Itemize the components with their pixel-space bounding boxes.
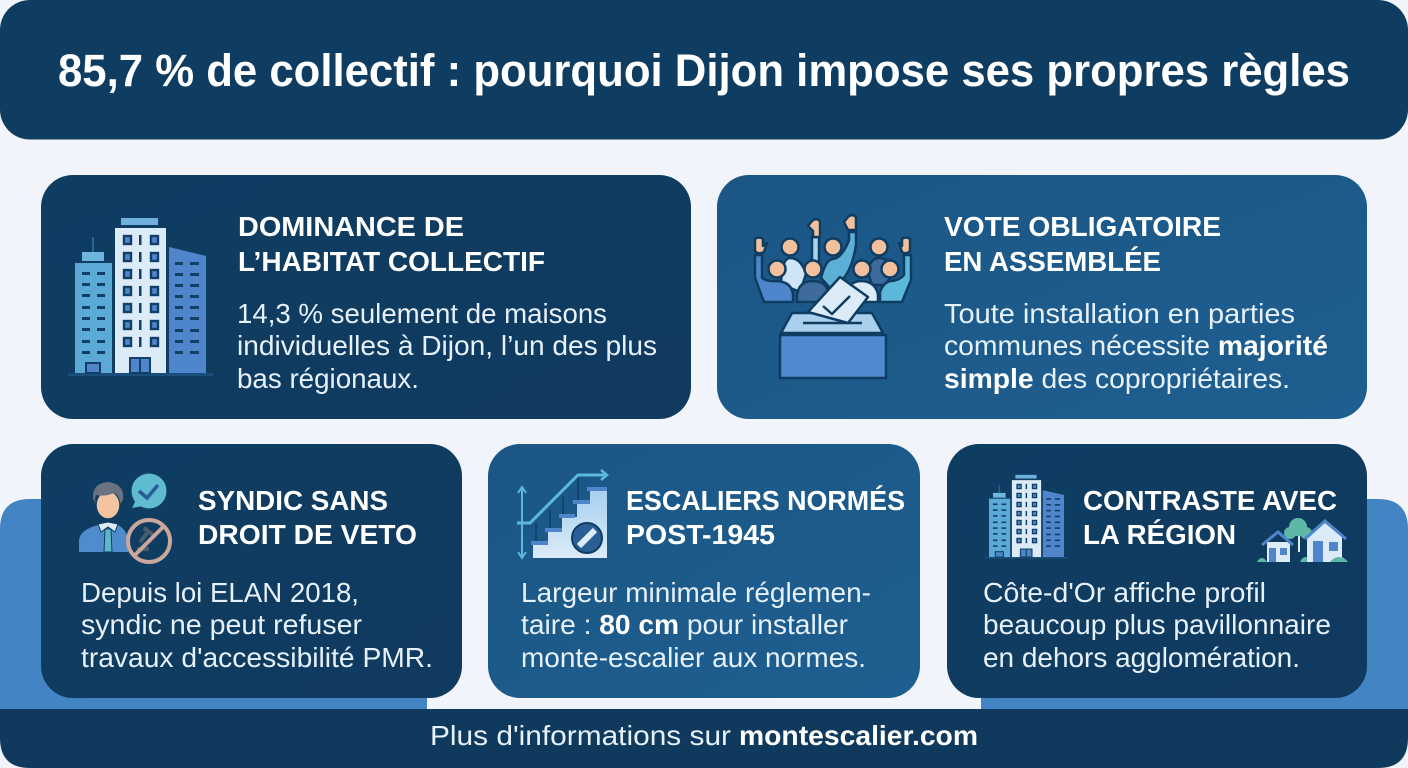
text: dominance body: 14,3 % seulement de maisons: [237, 298, 607, 329]
heading: syndic: [198, 485, 417, 550]
heading: dominance: L’HABITAT COLLECTIF: [238, 246, 545, 277]
heading: vote: EN ASSEMBLÉE: [944, 246, 1161, 277]
text: vote body: Toute installation en parties: [944, 298, 1295, 329]
text: syndic body: [81, 577, 433, 673]
text: vote body: communes nécessite majorité: [944, 330, 1328, 361]
text: escaliers body: Largeur minimale réglemen-: [521, 577, 871, 608]
heading: dominance: DOMINANCE DE: [238, 211, 464, 242]
icon: apartment buildings: [68, 218, 213, 376]
panel: dominance de l'habitat collectif: [41, 175, 691, 419]
text: contraste body: beaucoup plus pavillonnaire: [983, 609, 1331, 640]
heading: syndic: DROIT DE VETO: [198, 519, 417, 550]
text: contraste body: [983, 577, 1331, 673]
title: 85,7 % de collectif : pourquoi Dijon impose ses propres règles: [58, 45, 1350, 96]
text: escaliers body: monte-escalier aux normes.: [521, 642, 866, 673]
text: dominance body: individuelles à Dijon, l’un des plus: [237, 330, 657, 361]
icon: syndic with approval bubble and barred gavel: [79, 474, 170, 562]
heading: escaliers: ESCALIERS NORMÉS: [626, 485, 905, 516]
heading: escaliers: [626, 485, 905, 550]
footer bar: [0, 709, 1408, 768]
right blue backdrop band: [981, 499, 1408, 709]
icon: city buildings: [985, 475, 1068, 559]
heading: contraste: CONTRASTE AVEC: [1083, 485, 1337, 516]
footer text: Plus d'informations sur: [430, 720, 731, 751]
heading: contraste: LA RÉGION: [1083, 519, 1236, 550]
panel: syndic sans droit de veto: [41, 444, 462, 698]
text: syndic body: syndic ne peut refuser: [81, 609, 362, 640]
footer text: [430, 720, 978, 751]
left blue backdrop band: [0, 499, 427, 709]
title banner: [0, 0, 1408, 140]
heading: syndic: SYNDIC SANS: [198, 485, 388, 516]
text: dominance body: bas régionaux.: [237, 363, 419, 394]
text: escaliers body: taire : 80 cm pour installer: [521, 609, 848, 640]
panel: escaliers normés post-1945: [488, 444, 920, 698]
heading: contraste: [1083, 485, 1337, 550]
footer text: montescalier.com: [739, 720, 978, 751]
panel: vote obligatoire en assemblée: [717, 175, 1367, 419]
heading: dominance: [238, 211, 545, 277]
text: syndic body: Depuis loi ELAN 2018,: [81, 577, 359, 608]
text: contraste body: Côte-d'Or affiche profil: [983, 577, 1266, 608]
heading: vote: [944, 211, 1221, 277]
text: dominance body: [237, 298, 657, 394]
icon: stairs with rail and ruler: [517, 470, 607, 558]
heading: vote: VOTE OBLIGATOIRE: [944, 211, 1221, 242]
text: syndic body: travaux d'accessibilité PMR.: [81, 642, 433, 673]
panel: contraste avec la région: [947, 444, 1367, 698]
icon: voters and ballot box: [755, 215, 911, 378]
text: contraste body: en dehors agglomération.: [983, 642, 1300, 673]
text: vote body: simple des copropriétaires.: [944, 363, 1290, 394]
icon: houses and tree: [1257, 518, 1348, 562]
text: escaliers body: [521, 577, 871, 673]
heading: escaliers: POST-1945: [626, 519, 775, 550]
text: vote body: [944, 298, 1328, 394]
